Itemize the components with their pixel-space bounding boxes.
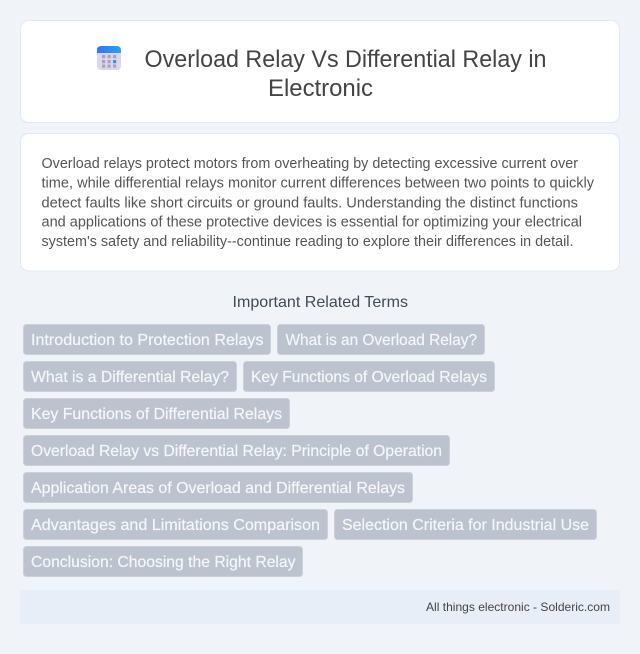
footer <box>20 590 620 624</box>
tag: what is an overload relay <box>278 324 484 354</box>
title <box>144 46 546 102</box>
tag: what is a differential relay <box>24 362 236 392</box>
text block: introduction paragraph: detect faults like short circuits or ground faults. Understanding the distinct functions <box>42 195 578 211</box>
icon: calendar grid <box>97 46 121 70</box>
tag: conclusion: Conclusion: Choosing the Right Relay <box>31 554 296 571</box>
text block: introduction paragraph: and applications of these protective devices is essential for optimizing your electrical <box>42 215 582 231</box>
title: Electronic <box>268 75 373 102</box>
text block: introduction paragraph: Overload relays protect motors from overheating by detecting excessive current over <box>42 156 578 172</box>
tag: introduction to protection relays <box>24 324 270 354</box>
tag: introduction to protection relays: Introduction to Protection Relays <box>31 332 264 349</box>
tag: principle of operation <box>24 436 450 466</box>
panel: title card <box>20 20 620 122</box>
text block: introduction paragraph: system's safety and reliability--continue reading to explore their differences in detail. <box>42 234 574 250</box>
panel: introduction text <box>20 134 620 271</box>
footer: All things electronic - Solderic.com <box>426 600 610 614</box>
tag: selection criteria for industrial use <box>334 510 596 540</box>
tag: conclusion <box>24 546 302 576</box>
heading: important related terms: Important Related Terms <box>232 294 408 311</box>
text block: introduction paragraph: time, while differential relays monitor current differences between two points to quickly <box>42 176 595 192</box>
tag: what is a differential relay: What is a Differential Relay? <box>31 369 229 386</box>
tag: application areas <box>24 472 412 502</box>
tag: key functions of overload relays: Key Functions of Overload Relays <box>251 369 487 386</box>
text block: introduction paragraph <box>42 156 595 250</box>
tag: advantages and limitations comparison: Advantages and Limitations Comparison <box>31 517 320 534</box>
tag: key functions of differential relays: Key Functions of Differential Relays <box>31 406 282 423</box>
tag: what is an overload relay: What is an Overload Relay? <box>286 332 477 349</box>
tag: selection criteria for industrial use: Selection Criteria for Industrial Use <box>342 517 589 534</box>
title: Overload Relay Vs Differential Relay in <box>144 46 546 73</box>
tag: key functions of overload relays <box>244 362 494 392</box>
tag: principle of operation: Overload Relay vs Differential Relay: Principle of Operation <box>31 443 442 460</box>
tag: application areas: Application Areas of Overload and Differential Relays <box>31 480 405 497</box>
tag: key functions of differential relays <box>24 398 290 428</box>
tag: advantages and limitations comparison <box>24 510 328 540</box>
